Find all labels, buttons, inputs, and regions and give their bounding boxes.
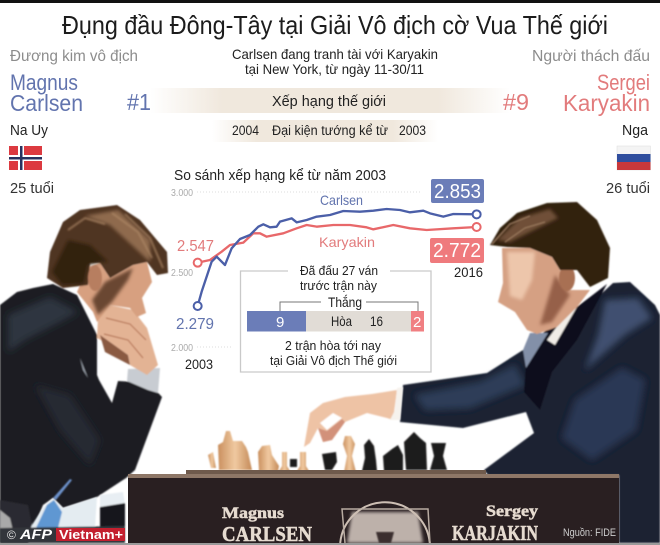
line: Karyakin xyxy=(194,223,481,267)
logo: AFP Vietnam+ xyxy=(7,526,125,542)
line chart: rating comparison: 2.279 xyxy=(176,316,214,333)
line chart: rating comparison: 3.000 xyxy=(171,188,193,199)
panel: Carlsen profile xyxy=(9,48,138,197)
icon: Norway flag xyxy=(9,146,42,170)
white pieces xyxy=(208,431,356,472)
line chart: rating comparison xyxy=(171,179,484,372)
subtitle: tại New York, từ ngày 11-30/11 xyxy=(245,61,424,77)
source note: Nguồn: FIDE xyxy=(563,527,616,539)
photo: shirt colours behind the logo xyxy=(0,479,125,543)
table front with name plates: KARJAKIN xyxy=(452,521,538,545)
callout: 2.853: 2.853 xyxy=(434,181,481,203)
subtitle: Carlsen đang tranh tài với Karyakin xyxy=(232,46,438,62)
photo: hand moving a chess piece xyxy=(304,387,403,447)
panel: head-to-head record: Thắng xyxy=(328,294,362,310)
callout: 2.772: 2.772 xyxy=(433,240,481,262)
stacked bar: wins and draws xyxy=(247,311,424,332)
top border xyxy=(0,0,660,3)
logo: AFP Vietnam+: AFP xyxy=(19,526,53,542)
table front with name plates xyxy=(128,470,619,545)
line chart: rating comparison: Carlsen xyxy=(320,192,363,208)
panel: Karyakin profile: Karyakin xyxy=(563,90,650,116)
line chart: rating comparison: 2003 xyxy=(185,356,213,372)
line chart: rating comparison: 2.547 xyxy=(177,238,214,255)
panel: Carlsen profile: Na Uy xyxy=(10,122,48,139)
table front with name plates: Sergey xyxy=(486,503,538,520)
stacked bar: wins and draws: 9 xyxy=(276,314,284,331)
chess pieces xyxy=(208,431,447,472)
panel: head-to-head record: Đã đấu 27 ván xyxy=(300,263,378,278)
stacked bar: wins and draws: Hòa xyxy=(331,313,352,329)
line: Carlsen xyxy=(194,209,481,310)
chart heading: So sánh xếp hạng kể từ năm 2003 xyxy=(174,167,386,184)
panel: Carlsen profile: Carlsen xyxy=(10,90,83,116)
panel: Karyakin profile xyxy=(532,48,650,197)
panel: Karyakin profile: Sergei xyxy=(597,70,650,95)
panel: Karyakin profile: 26 tuổi xyxy=(606,180,650,197)
world ranking band xyxy=(127,88,529,115)
emblem xyxy=(340,502,430,543)
table front with name plates: Magnus xyxy=(222,505,284,522)
world ranking band: #1 xyxy=(127,89,151,115)
logo: AFP Vietnam+: © xyxy=(7,528,16,542)
line chart: rating comparison: 2.500 xyxy=(171,268,193,279)
black pieces xyxy=(290,432,447,471)
grandmaster band xyxy=(212,120,438,142)
grandmaster band: 2003 xyxy=(399,123,426,138)
panel: Karyakin profile: Nga xyxy=(622,122,649,139)
logo: AFP Vietnam+: Vietnam+ xyxy=(59,528,123,542)
panel: Carlsen profile: Magnus xyxy=(10,70,78,95)
panel: head-to-head record: 2 trận hòa tới nay xyxy=(285,338,381,353)
panel: Carlsen profile: 25 tuổi xyxy=(10,180,54,197)
panel: head-to-head record xyxy=(240,263,431,372)
line chart: rating comparison: 2016 xyxy=(454,264,483,280)
panel: Carlsen profile: Đương kim vô địch xyxy=(10,48,138,65)
grandmaster band: Đại kiện tướng kể từ xyxy=(272,123,388,138)
title: Đụng đầu Đông-Tây tại Giải Vô địch cờ Vua Thế giới xyxy=(62,10,608,40)
stacked bar: wins and draws: 2 xyxy=(413,314,421,331)
panel: head-to-head record: trước trận này xyxy=(300,278,377,293)
world ranking band: Xếp hạng thế giới xyxy=(272,93,386,110)
grandmaster band: 2004 xyxy=(232,123,259,138)
stacked bar: wins and draws: 16 xyxy=(370,313,383,329)
subtitle xyxy=(232,46,438,77)
icon: Russia flag xyxy=(617,146,650,170)
photo: Magnus Carlsen xyxy=(0,205,168,543)
bottom border xyxy=(0,543,660,545)
photo: Sergei Karyakin xyxy=(400,202,660,543)
world ranking band: #9 xyxy=(503,89,529,115)
line chart: rating comparison: Karyakin xyxy=(319,234,375,250)
panel: head-to-head record: tại Giải Vô địch Thế giới xyxy=(270,353,397,368)
line chart: rating comparison: 2.000 xyxy=(171,343,193,354)
panel: Karyakin profile: Người thách đấu xyxy=(532,48,650,65)
